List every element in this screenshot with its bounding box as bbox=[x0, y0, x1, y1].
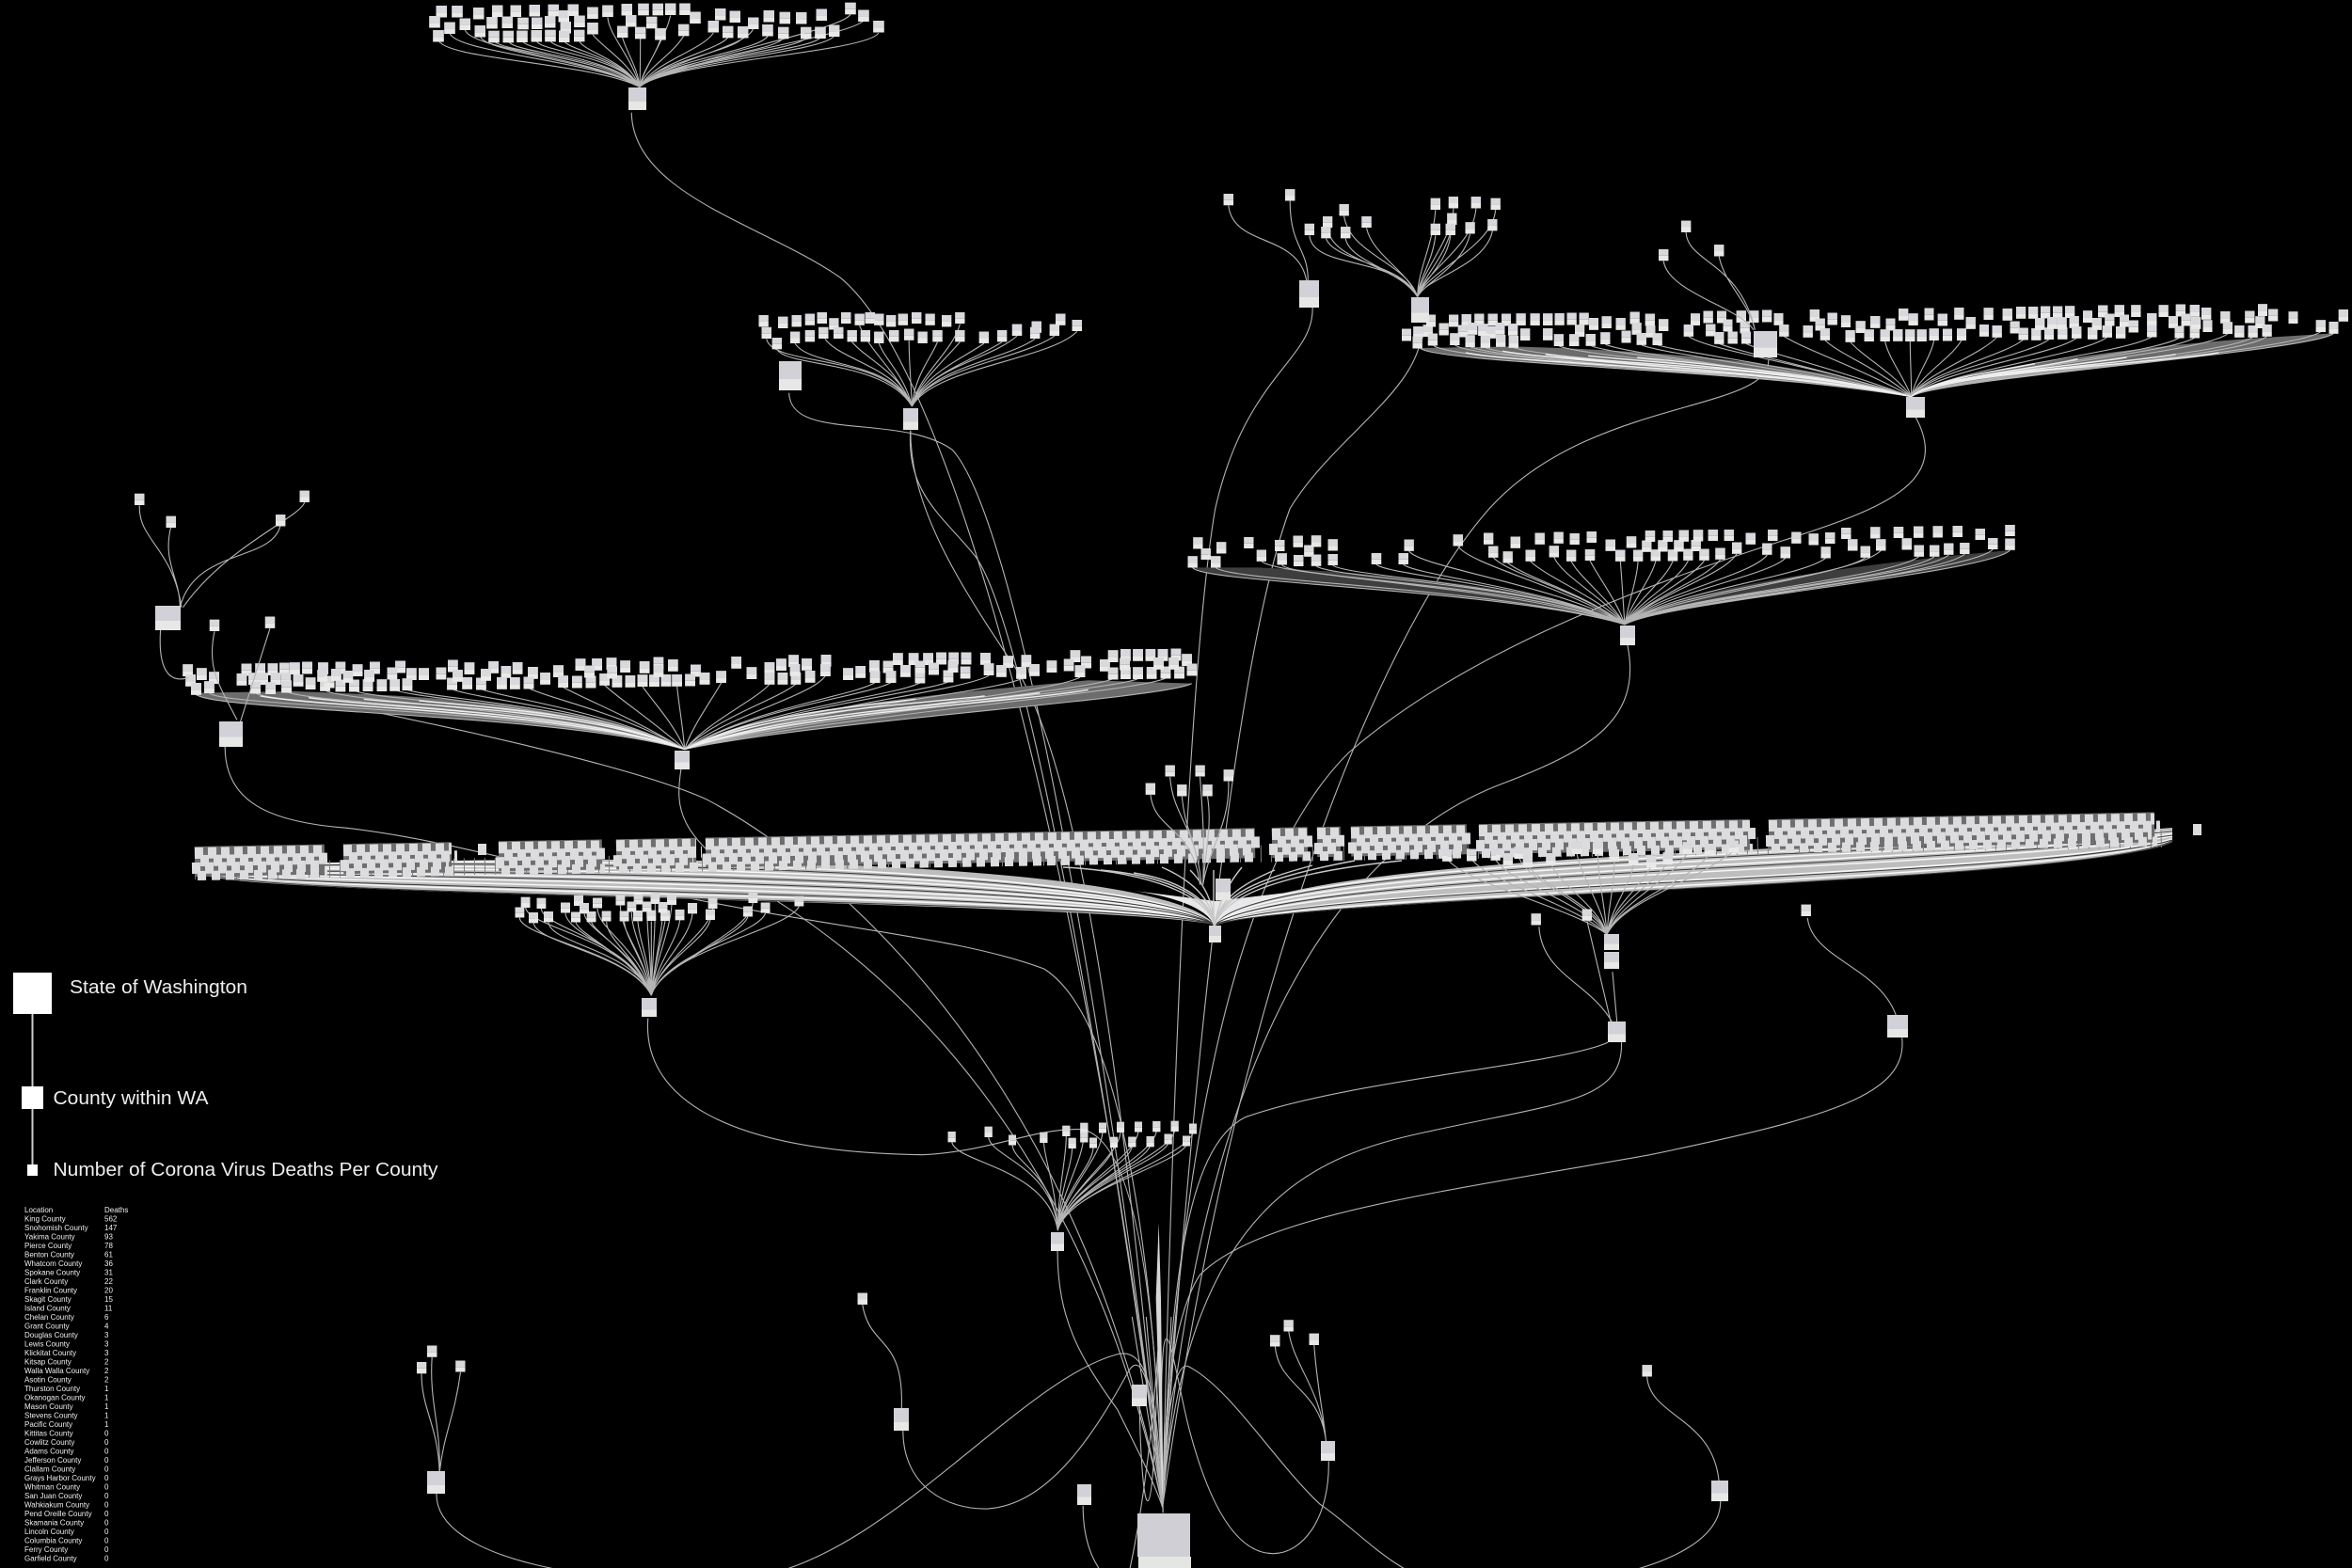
fan lines bbox=[195, 675, 1192, 750]
table: deaths by county: 1 bbox=[104, 1412, 109, 1420]
county cluster: lower middle bbox=[952, 1126, 1193, 1230]
table: deaths by county: 0 bbox=[104, 1537, 109, 1545]
table: deaths by county: 0 bbox=[104, 1510, 109, 1518]
table: deaths by county: Clallam County bbox=[24, 1465, 75, 1474]
table: deaths by county: King County bbox=[24, 1215, 66, 1223]
fan lines bbox=[1193, 546, 2010, 625]
table: deaths by county: 6 bbox=[104, 1313, 109, 1322]
table: deaths by county: 147 bbox=[104, 1224, 118, 1232]
table: deaths by county: 0 bbox=[104, 1555, 109, 1563]
legend: state bbox=[13, 973, 247, 1014]
table: deaths by county: Pend Oreille County bbox=[24, 1510, 92, 1518]
table: deaths by county: Grant County bbox=[24, 1323, 70, 1331]
table: deaths by county: Benton County bbox=[24, 1251, 74, 1259]
table: deaths by county: Douglas County bbox=[24, 1331, 78, 1339]
fan lines bbox=[952, 1131, 1193, 1230]
county cluster: right of main band bbox=[1447, 847, 1734, 934]
table: deaths by county: Columbia County bbox=[24, 1537, 82, 1545]
table: deaths by county: 31 bbox=[104, 1268, 113, 1277]
table: deaths by county: Walla Walla County bbox=[24, 1367, 89, 1375]
legend bbox=[13, 973, 437, 1180]
table: deaths by county: 93 bbox=[104, 1232, 113, 1242]
table: deaths by county: Jefferson County bbox=[24, 1456, 81, 1465]
fan lines small bbox=[139, 201, 1755, 1473]
table: deaths by county: 2 bbox=[104, 1367, 109, 1375]
table: deaths by county: 3 bbox=[104, 1340, 109, 1349]
table: deaths by county: 0 bbox=[104, 1456, 109, 1465]
fan lines bbox=[438, 14, 879, 87]
table: deaths by county: Kittitas County bbox=[24, 1430, 73, 1438]
legend: county: County within WA bbox=[53, 1088, 209, 1109]
table: deaths by county: Grays Harbor County bbox=[24, 1474, 96, 1482]
table: deaths by county: 1 bbox=[104, 1385, 109, 1393]
table: deaths by county: Lincoln County bbox=[24, 1528, 74, 1536]
table: deaths by county: 0 bbox=[104, 1545, 109, 1554]
table: deaths by county: Deaths bbox=[104, 1206, 128, 1214]
table: deaths by county: Location bbox=[24, 1206, 53, 1214]
table: deaths by county: Skagit County bbox=[24, 1295, 72, 1304]
table: deaths by county: 0 bbox=[104, 1483, 109, 1492]
table: deaths by county bbox=[24, 1206, 128, 1563]
table: deaths by county: 20 bbox=[104, 1287, 113, 1294]
table: deaths by county: Adams County bbox=[24, 1448, 73, 1456]
table: deaths by county: Asotin County bbox=[24, 1376, 72, 1385]
table: deaths by county: Chelan County bbox=[24, 1313, 74, 1322]
table: deaths by county: Franklin County bbox=[24, 1287, 77, 1294]
table: deaths by county: 0 bbox=[104, 1519, 109, 1528]
table: deaths by county: 3 bbox=[104, 1331, 109, 1339]
fan lines bbox=[519, 903, 799, 995]
fan: largest county band bbox=[195, 828, 2172, 927]
table: deaths by county: Clark County bbox=[24, 1277, 68, 1286]
fan lines bbox=[1447, 851, 1734, 934]
table: deaths by county: Thurston County bbox=[24, 1385, 80, 1393]
county node cluster: King County leaf rows bbox=[192, 818, 2201, 876]
table: deaths by county: 78 bbox=[104, 1242, 113, 1250]
county cluster: top bbox=[435, 8, 879, 87]
county cluster: left middle bbox=[188, 655, 1192, 750]
table: deaths by county: 0 bbox=[104, 1528, 109, 1536]
table: deaths by county: 61 bbox=[104, 1251, 113, 1259]
table: deaths by county: Stevens County bbox=[24, 1412, 77, 1420]
small county leaf groups bbox=[139, 195, 1806, 1473]
table: deaths by county: Okanogan County bbox=[24, 1394, 85, 1402]
table: deaths by county: Garfield County bbox=[24, 1555, 77, 1563]
table: deaths by county: Whitman County bbox=[24, 1483, 80, 1492]
table: deaths by county: Klickitat County bbox=[24, 1349, 76, 1357]
table: deaths by county: 2 bbox=[104, 1358, 109, 1367]
table: deaths by county: Lewis County bbox=[24, 1340, 70, 1349]
table: deaths by county: Pierce County bbox=[24, 1242, 72, 1250]
table: deaths by county: 0 bbox=[104, 1492, 109, 1500]
table: deaths by county: Snohomish County bbox=[24, 1224, 88, 1232]
table: deaths by county: 3 bbox=[104, 1349, 109, 1357]
table: deaths by county: 0 bbox=[104, 1448, 109, 1456]
table: deaths by county: 2 bbox=[104, 1376, 109, 1385]
table: deaths by county: Pacific County bbox=[24, 1420, 72, 1429]
table: deaths by county: Kitsap County bbox=[24, 1358, 72, 1367]
table: deaths by county: 1 bbox=[104, 1420, 109, 1429]
table: deaths by county: 36 bbox=[104, 1259, 113, 1268]
table: deaths by county: Yakima County bbox=[24, 1232, 75, 1242]
table: deaths by county: Cowlitz County bbox=[24, 1438, 74, 1447]
table: deaths by county: Island County bbox=[24, 1304, 71, 1313]
table: deaths by county: 0 bbox=[104, 1465, 109, 1474]
table: deaths by county: 11 bbox=[104, 1304, 113, 1313]
table: deaths by county: 0 bbox=[104, 1430, 109, 1438]
legend: deaths: Number of Corona Virus Deaths Per County bbox=[53, 1160, 437, 1180]
links from state root to county nodes bbox=[225, 113, 1925, 1568]
table: deaths by county: Whatcom County bbox=[24, 1259, 82, 1268]
table: deaths by county: Spokane County bbox=[24, 1268, 80, 1277]
legend: state: State of Washington bbox=[70, 977, 247, 998]
county cluster: right middle bbox=[1193, 531, 2010, 625]
table: deaths by county: Skamania County bbox=[24, 1519, 84, 1528]
table: deaths by county: 1 bbox=[104, 1394, 109, 1402]
county cluster: upper middle bbox=[764, 318, 1077, 406]
table: deaths by county: 0 bbox=[104, 1474, 109, 1482]
table: deaths by county: Mason County bbox=[24, 1402, 73, 1411]
fan lines bbox=[1420, 332, 2333, 397]
table: deaths by county: 4 bbox=[104, 1323, 109, 1331]
table: deaths by county: 1 bbox=[104, 1402, 109, 1411]
table: deaths by county: 15 bbox=[104, 1295, 113, 1304]
table: deaths by county: San Juan County bbox=[24, 1492, 82, 1500]
table: deaths by county: Ferry County bbox=[24, 1545, 68, 1554]
county cluster: below main band bbox=[519, 897, 799, 995]
county nodes bbox=[155, 87, 1925, 1505]
county cluster: right upper large bbox=[1406, 310, 2344, 397]
table: deaths by county: 22 bbox=[104, 1277, 113, 1286]
table: deaths by county: Wahkiakum County bbox=[24, 1501, 89, 1510]
table: deaths by county: 0 bbox=[104, 1438, 109, 1447]
table: deaths by county: 0 bbox=[104, 1501, 109, 1510]
fan lines bbox=[767, 324, 1077, 406]
table: deaths by county: 562 bbox=[104, 1215, 118, 1223]
state root node bbox=[1137, 1513, 1191, 1568]
